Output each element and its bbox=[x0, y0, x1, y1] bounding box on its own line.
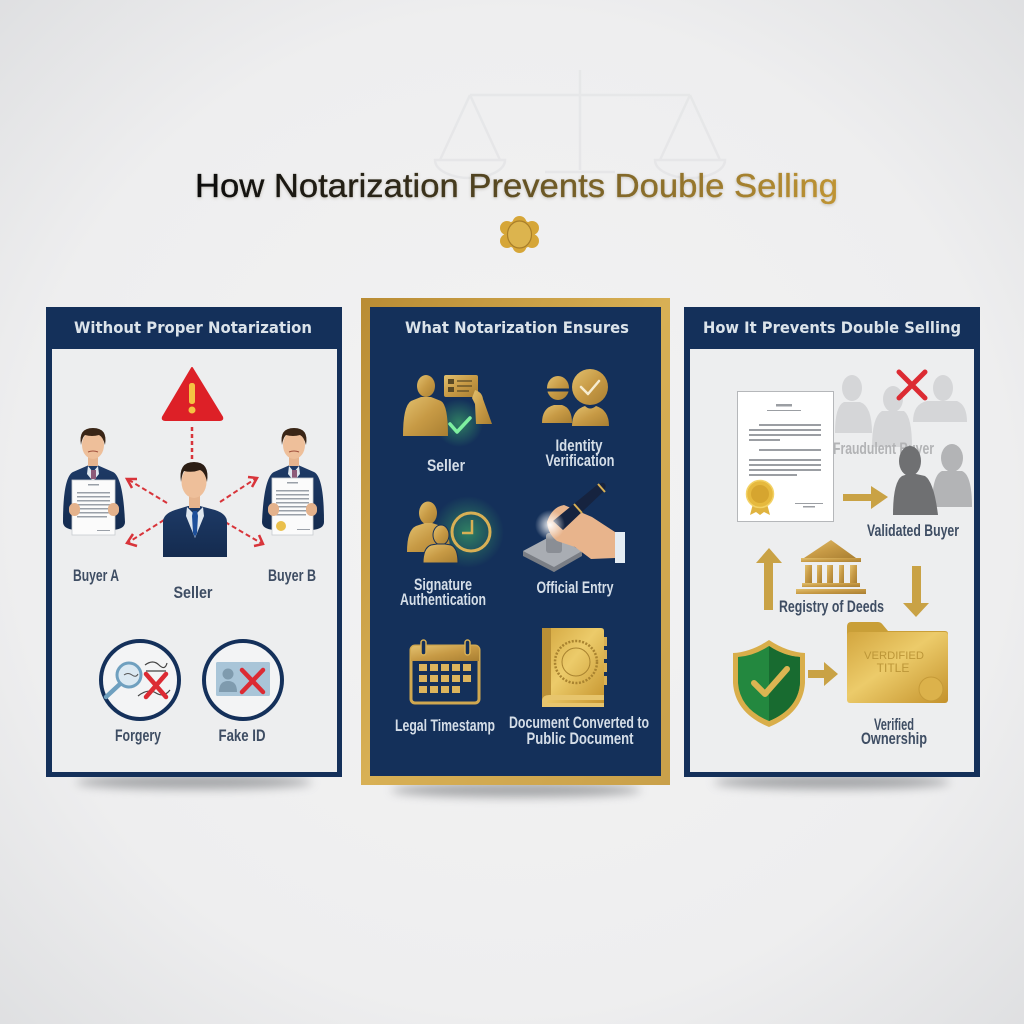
icon: registry building bbox=[796, 540, 866, 594]
label: legal timestamp: Legal Timestamp bbox=[395, 716, 495, 735]
label: signature authentication bbox=[400, 575, 486, 609]
label: fake ID: Fake ID bbox=[218, 726, 266, 745]
figures: fraudulent buyers bbox=[835, 375, 967, 447]
arrow: document to buyer bbox=[843, 486, 888, 509]
arrow: up bbox=[756, 548, 782, 610]
label: verified ownership bbox=[861, 715, 927, 748]
label: forgery: Forgery bbox=[115, 726, 161, 745]
label: seller: Seller bbox=[427, 456, 465, 475]
panel: without proper notarization bbox=[46, 307, 342, 777]
icon: verified title folder bbox=[847, 622, 948, 703]
icon: verified title folder: TITLE bbox=[877, 661, 909, 675]
arrows from seller bbox=[127, 427, 263, 546]
icon: official entry hand and stamp bbox=[523, 483, 625, 572]
heading: what notarization ensures: What Notarization Ensures bbox=[405, 318, 629, 337]
label: document converted to public document: Document Converted to bbox=[509, 713, 649, 732]
label: verified ownership: Ownership bbox=[861, 729, 927, 748]
arrow: shield to folder bbox=[808, 662, 838, 686]
icon: signature authentication bbox=[407, 496, 504, 568]
panel: how it prevents double selling bbox=[684, 307, 980, 777]
label: official entry: Official Entry bbox=[536, 578, 614, 597]
icon: forgery bbox=[101, 641, 179, 719]
label: identity verification bbox=[546, 436, 614, 470]
figure: buyer A bbox=[63, 428, 125, 535]
label: buyer B: Buyer B bbox=[268, 566, 316, 585]
label: seller: Seller bbox=[174, 583, 213, 602]
icon: gold seal bbox=[500, 216, 539, 253]
label: verified ownership: Verified bbox=[874, 715, 914, 734]
label: signature authentication: Authentication bbox=[400, 590, 486, 609]
icon: verified title folder: VERDIFIED bbox=[864, 650, 924, 662]
label: registry of deeds: Registry of Deeds bbox=[779, 597, 884, 616]
background scales of justice watermark bbox=[435, 70, 725, 178]
label: identity verification: Identity bbox=[556, 436, 603, 455]
figures: validated buyer bbox=[893, 444, 972, 515]
label: buyer A: Buyer A bbox=[73, 566, 119, 585]
icon: calendar bbox=[411, 640, 479, 703]
label: signature authentication: Signature bbox=[414, 575, 472, 594]
icon: red X bbox=[899, 372, 925, 398]
figure: seller bbox=[163, 462, 227, 557]
label: fraudulent buyer: Fraudulent Buyer bbox=[833, 439, 934, 458]
label: document converted to public document bbox=[509, 713, 649, 748]
icon: green shield bbox=[733, 640, 805, 727]
title: How Notarization Prevents Double Selling bbox=[195, 168, 838, 205]
label: document converted to public document: Public Document bbox=[526, 729, 634, 748]
arrow: down bbox=[903, 566, 929, 617]
panel shadows bbox=[76, 775, 950, 797]
icon: public document book bbox=[542, 628, 607, 707]
panel: what notarization ensures bbox=[361, 298, 670, 785]
icon: warning triangle bbox=[163, 368, 222, 420]
title: How Notarization Prevents Double Selling bbox=[195, 167, 838, 204]
figure: buyer B bbox=[262, 428, 324, 535]
icon: fake ID bbox=[204, 641, 282, 719]
heading: without proper notarization: Without Proper Notarization bbox=[74, 318, 312, 337]
icon: seller with ID card bbox=[403, 375, 492, 447]
icon: notarized document bbox=[738, 392, 834, 522]
label: validated buyer: Validated Buyer bbox=[867, 521, 959, 540]
label: identity verification: Verification bbox=[546, 451, 614, 470]
heading: how it prevents double selling: How It Prevents Double Selling bbox=[703, 318, 961, 337]
icon: identity verification bbox=[542, 369, 609, 426]
